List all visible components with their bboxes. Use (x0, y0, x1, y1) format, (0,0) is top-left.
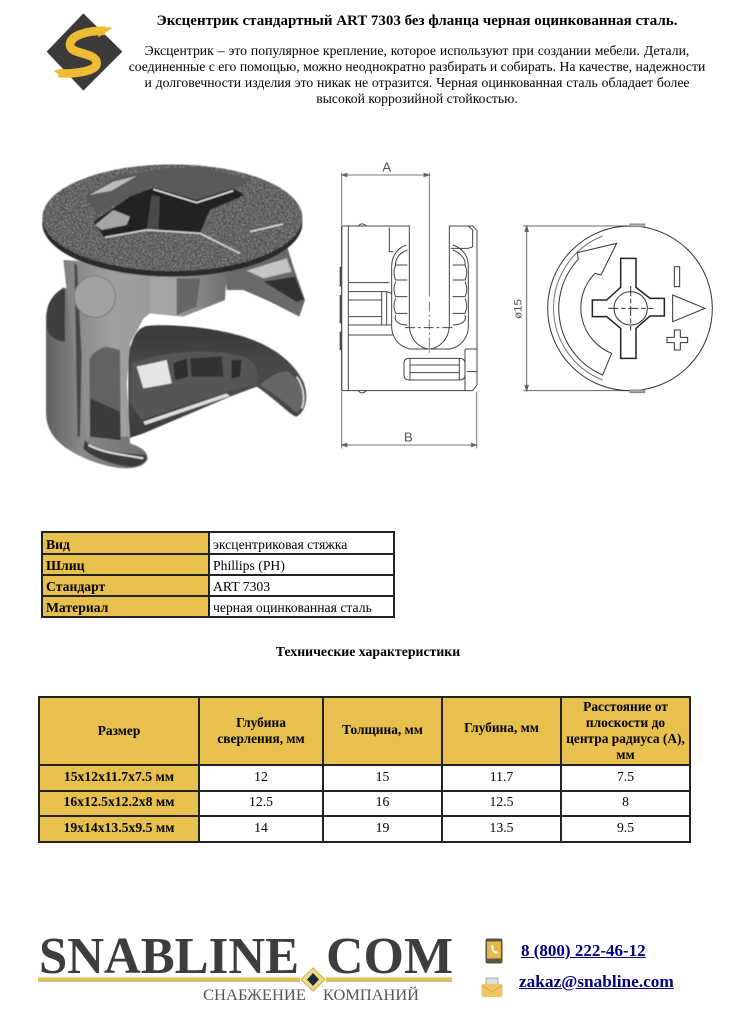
side tabs (338, 267, 342, 350)
specifications table: Глубина (236, 715, 286, 730)
properties table: эксцентриковая стяжка (213, 536, 347, 552)
specifications table: 16x12.5x12.2x8 мм (63, 794, 175, 809)
description text: и долговечности изделия это никак не отразится. Черная оцинкованная сталь обладает более (144, 75, 690, 90)
properties table: Вид (46, 536, 70, 552)
tooth profile right (429, 245, 468, 349)
centre mark (405, 326, 455, 329)
lower cup (128, 325, 306, 438)
disk face (42, 164, 302, 271)
properties table: Шлиц (46, 558, 84, 573)
left barrel and claw (46, 287, 148, 468)
technical drawing: top view (513, 224, 713, 394)
main body (63, 260, 227, 437)
plus sign (667, 330, 688, 350)
properties table: Phillips (PH) (213, 558, 285, 573)
bottom claw highlight (83, 440, 146, 467)
footer logo: SNABLINE.COM: COM (326, 928, 453, 985)
tooth profile left (392, 245, 429, 349)
specifications table: 8 (622, 794, 629, 809)
specifications table: 7.5 (617, 768, 634, 784)
recessed arc (85, 167, 252, 215)
specifications table: 11.7 (490, 768, 513, 784)
title: Эксцентрик стандартный ART 7303 без фланца черная оцинкованная сталь. (157, 13, 677, 29)
label: diameter: ø15 (513, 299, 525, 319)
logo: S diamond (46, 13, 122, 91)
technical drawing: side section (340, 160, 478, 448)
specifications table: Расстояние от (583, 699, 668, 714)
specifications heading: Технические характеристики (276, 644, 460, 659)
properties table: Стандарт (46, 579, 105, 594)
labels A and B: A (382, 160, 391, 175)
specifications table: 15x12x11.7x7.5 мм (64, 768, 174, 784)
specifications table: 14 (254, 820, 268, 834)
specifications table: 13.5 (490, 820, 513, 834)
product photo: eccentric fitting (42, 164, 307, 469)
email address: zakaz@snabline.com (519, 972, 674, 991)
description text: соединенные с его помощью, можно неоднократно разбирать и собирать. На качестве, надежности (129, 59, 705, 74)
icon: phone (486, 938, 502, 964)
drive recess (93, 187, 245, 237)
specifications table: мм (616, 747, 635, 762)
specifications table: плоскости до (586, 715, 665, 730)
window in body (89, 347, 121, 440)
right prong (225, 245, 305, 317)
specifications table: Глубина, мм (464, 720, 539, 735)
specifications table: 12 (254, 768, 268, 784)
specifications table: 9.5 (617, 820, 634, 834)
dimension diameter (523, 226, 630, 391)
specifications table: 19x14x13.5x9.5 мм (63, 820, 175, 834)
footer logo: SNABLINE.COM: СНАБЖЕНИЕ (203, 987, 306, 1004)
specifications table: Толщина, мм (342, 722, 423, 736)
phone number: 8 (800) 222-46-12 (521, 941, 646, 960)
specifications table: Размер (98, 723, 140, 738)
outer circle (548, 226, 712, 391)
triangle (673, 295, 705, 322)
cross slot (592, 258, 664, 358)
specifications table: 12.5 (490, 794, 513, 809)
description text: высокой коррозийной стойкостью. (316, 91, 518, 106)
body outline (342, 226, 477, 391)
footer logo: SNABLINE.COM (38, 928, 453, 1004)
specifications table: центра радиуса (А), (566, 731, 685, 746)
description text: Эксцентрик – это популярное крепление, которое используют при создании мебели. Детали, (145, 43, 689, 58)
minus sign (674, 267, 680, 287)
disk rim (42, 170, 302, 277)
specifications table: 15 (376, 768, 389, 784)
properties table: черная оцинкованная сталь (213, 600, 372, 615)
specifications table: сверления, мм (217, 731, 305, 746)
set screw (348, 283, 393, 335)
pin (404, 358, 465, 380)
footer logo: SNABLINE.COM: КОМПАНИЙ (323, 987, 419, 1004)
specifications table: 16 (376, 794, 389, 809)
labels A and B (382, 160, 413, 445)
properties table: ART 7303 (213, 579, 270, 594)
footer logo: SNABLINE.COM: SNABLINE (39, 928, 299, 985)
specifications table: 12.5 (249, 794, 273, 809)
rotation arrow (559, 243, 617, 375)
icon: mail (482, 978, 502, 997)
properties table (41, 531, 395, 618)
specifications table (38, 696, 691, 843)
description text (129, 43, 705, 106)
labels A and B: B (404, 430, 413, 445)
dimension A (342, 173, 477, 448)
specifications table: 19 (376, 820, 389, 834)
properties table: Материал (46, 600, 108, 615)
